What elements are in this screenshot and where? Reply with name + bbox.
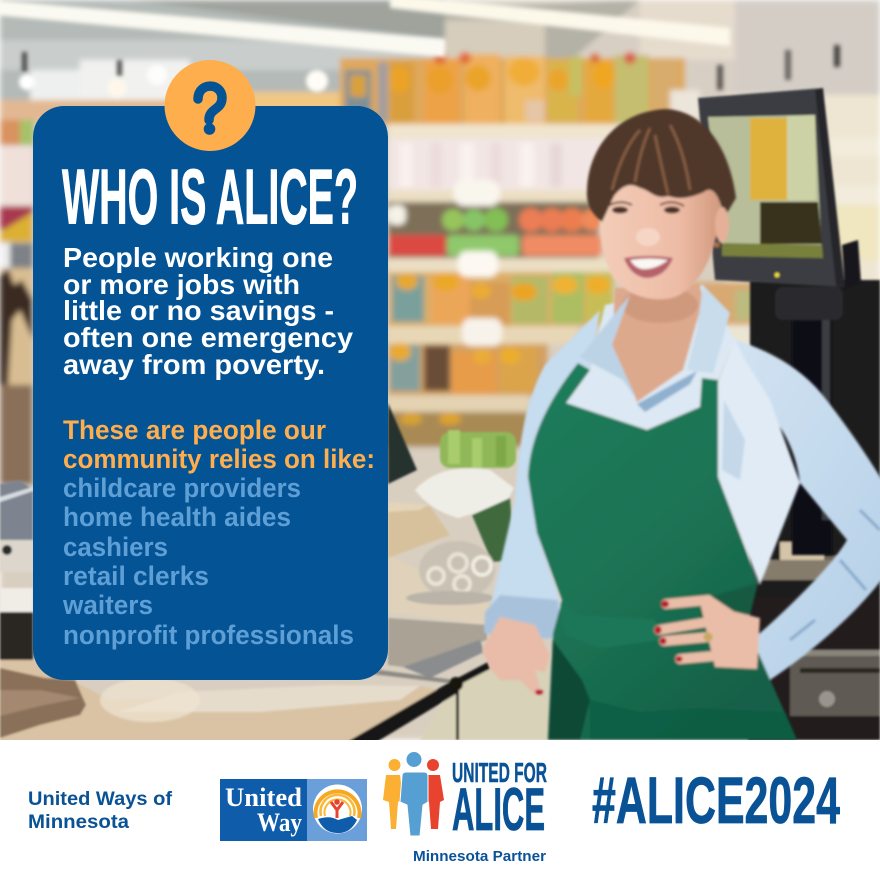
apron	[528, 363, 797, 740]
nails	[654, 600, 682, 662]
stack of paper bags	[0, 668, 86, 738]
panel background	[33, 106, 388, 680]
eyes	[612, 206, 628, 214]
bokeh lights	[0, 0, 840, 97]
white bags	[415, 468, 514, 518]
logo: United Way: Way	[257, 808, 302, 837]
fruit rows	[388, 208, 603, 256]
footer: United Ways of Minnesota	[28, 789, 173, 833]
left hand	[482, 617, 550, 693]
dark silhouette on left	[0, 268, 33, 385]
heading: WHO IS ALICE?	[62, 152, 358, 240]
text block: occupations list: retail clerks	[63, 561, 209, 591]
partner label: Minnesota Partner	[413, 849, 546, 865]
text block: community intro: These are people our	[63, 415, 326, 445]
smile	[624, 256, 673, 278]
wordmark: UNITED FOR	[452, 757, 547, 788]
text block: occupations list: home health aides	[63, 502, 291, 532]
ear and earring	[715, 207, 729, 243]
celery	[440, 432, 516, 468]
nose highlight	[636, 228, 660, 246]
dark counter, right	[750, 280, 880, 600]
leaf greens	[472, 498, 515, 562]
text block: community intro: community relies on like:	[63, 444, 375, 474]
text block: definition: little or no savings -	[63, 295, 334, 326]
face	[600, 168, 720, 299]
text block: occupations list: waiters	[62, 590, 153, 620]
text block: community intro	[63, 415, 375, 474]
shelves	[388, 138, 628, 192]
hand on hip	[659, 600, 760, 669]
icon: question mark badge	[164, 60, 256, 151]
text block: occupations list: cashiers	[63, 532, 168, 562]
torso shirt	[717, 340, 800, 585]
register monitor	[698, 88, 861, 555]
neck and chest	[612, 285, 703, 402]
text block: definition: People working one	[63, 242, 333, 273]
hair	[587, 109, 736, 222]
footer: United Ways of Minnesota: United Ways of	[28, 789, 173, 810]
three figures	[383, 752, 444, 836]
left sleeve	[484, 310, 600, 640]
text block: occupations list: childcare providers	[63, 473, 301, 503]
right shelves	[725, 95, 880, 285]
bottles on top shelf	[345, 70, 371, 120]
footer band	[0, 740, 880, 880]
middle counter	[388, 555, 490, 625]
cream cabinet	[420, 668, 548, 740]
small screen	[388, 403, 417, 484]
right arm	[735, 340, 880, 680]
logo: United for ALICE: ALICE	[452, 776, 545, 843]
black counter edge	[348, 661, 490, 740]
left edge products	[0, 120, 33, 145]
collar	[580, 295, 637, 400]
logo: United Way: United	[225, 783, 303, 812]
ring	[704, 632, 712, 642]
logo: United Way	[220, 779, 367, 841]
text block: definition: often one emergency	[63, 322, 353, 353]
text block: definition: or more jobs with	[63, 269, 300, 300]
text block: occupations list	[62, 473, 354, 650]
pretzel container	[419, 541, 496, 592]
text block: occupations list: nonprofit professionals	[63, 620, 354, 650]
text block: definition	[63, 242, 353, 380]
text block: definition: away from poverty.	[63, 349, 325, 380]
logo: United for ALICE	[383, 752, 547, 865]
footer: United Ways of Minnesota: Minnesota	[28, 812, 129, 833]
scale on the left	[0, 480, 33, 545]
checkout counter, left	[0, 280, 880, 746]
panel: who is ALICE	[33, 60, 388, 680]
cardboard box	[388, 506, 450, 558]
shoulders and chest shirt	[566, 285, 735, 430]
woman cashier	[482, 109, 880, 740]
